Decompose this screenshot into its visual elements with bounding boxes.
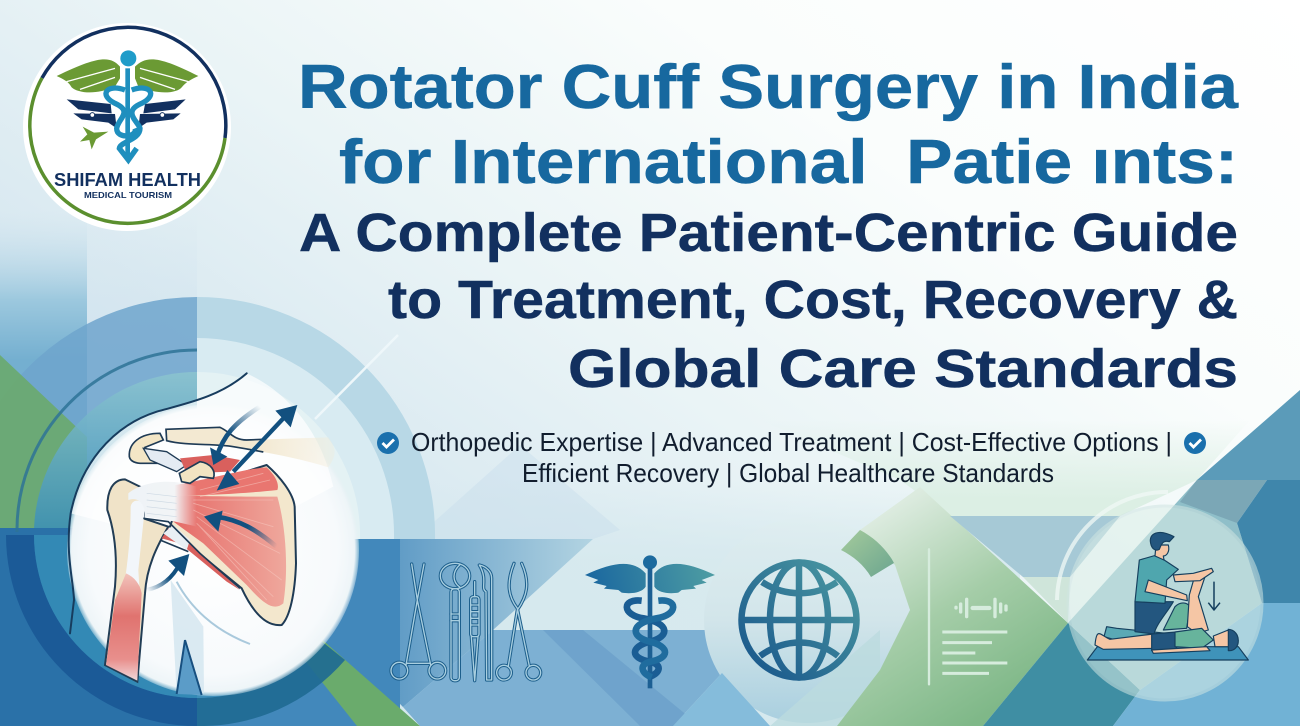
title: for International Patie ınts: [339, 128, 1238, 197]
icon: surgical instruments [391, 563, 541, 681]
scapula [170, 465, 296, 625]
pale lower field [380, 480, 1020, 726]
subtitle: Efficient Recovery | Global Healthcare Standards [522, 458, 1054, 488]
logo: MEDICAL TOURISM [84, 190, 172, 200]
panel: shoulder anatomy illustration [67, 373, 359, 696]
lower quadrant fills [0, 528, 197, 726]
arrows [217, 407, 260, 457]
subtitle [411, 427, 1172, 488]
white tendon [128, 482, 197, 527]
diagonal light line [315, 335, 398, 419]
band behind instruments [357, 539, 593, 707]
icon: globe [742, 562, 856, 678]
coracoid [179, 462, 214, 483]
physiotherapy figures [1087, 532, 1248, 660]
icon: check left [377, 432, 399, 454]
title: to Treatment, Cost, Recovery & [388, 270, 1238, 330]
green ring segment near globe [841, 530, 894, 577]
rotator cuff muscles [157, 495, 286, 607]
title [298, 53, 1239, 399]
icon: check right [1184, 432, 1206, 454]
logo: SHIFAM HEALTH [54, 170, 201, 190]
title: Global Care Standards [568, 339, 1238, 399]
icon: caduceus [585, 555, 715, 688]
title: A Complete Patient-Centric Guide [299, 203, 1238, 263]
acromion [129, 433, 163, 463]
shoulder rings [0, 297, 435, 726]
icon: dumbbell and exercise notes [929, 549, 1007, 684]
subtitle: Orthopedic Expertise | Advanced Treatment | Cost-Effective Options | [411, 427, 1172, 457]
title: Rotator Cuff Surgery in India [298, 53, 1239, 122]
humerus [105, 479, 168, 682]
clavicle [166, 427, 335, 467]
green left triangle [0, 355, 87, 528]
anatomy drawing [69, 373, 335, 695]
logo [23, 23, 231, 231]
panel: physiotherapy circle [1057, 492, 1262, 700]
logo emblem [57, 50, 198, 160]
